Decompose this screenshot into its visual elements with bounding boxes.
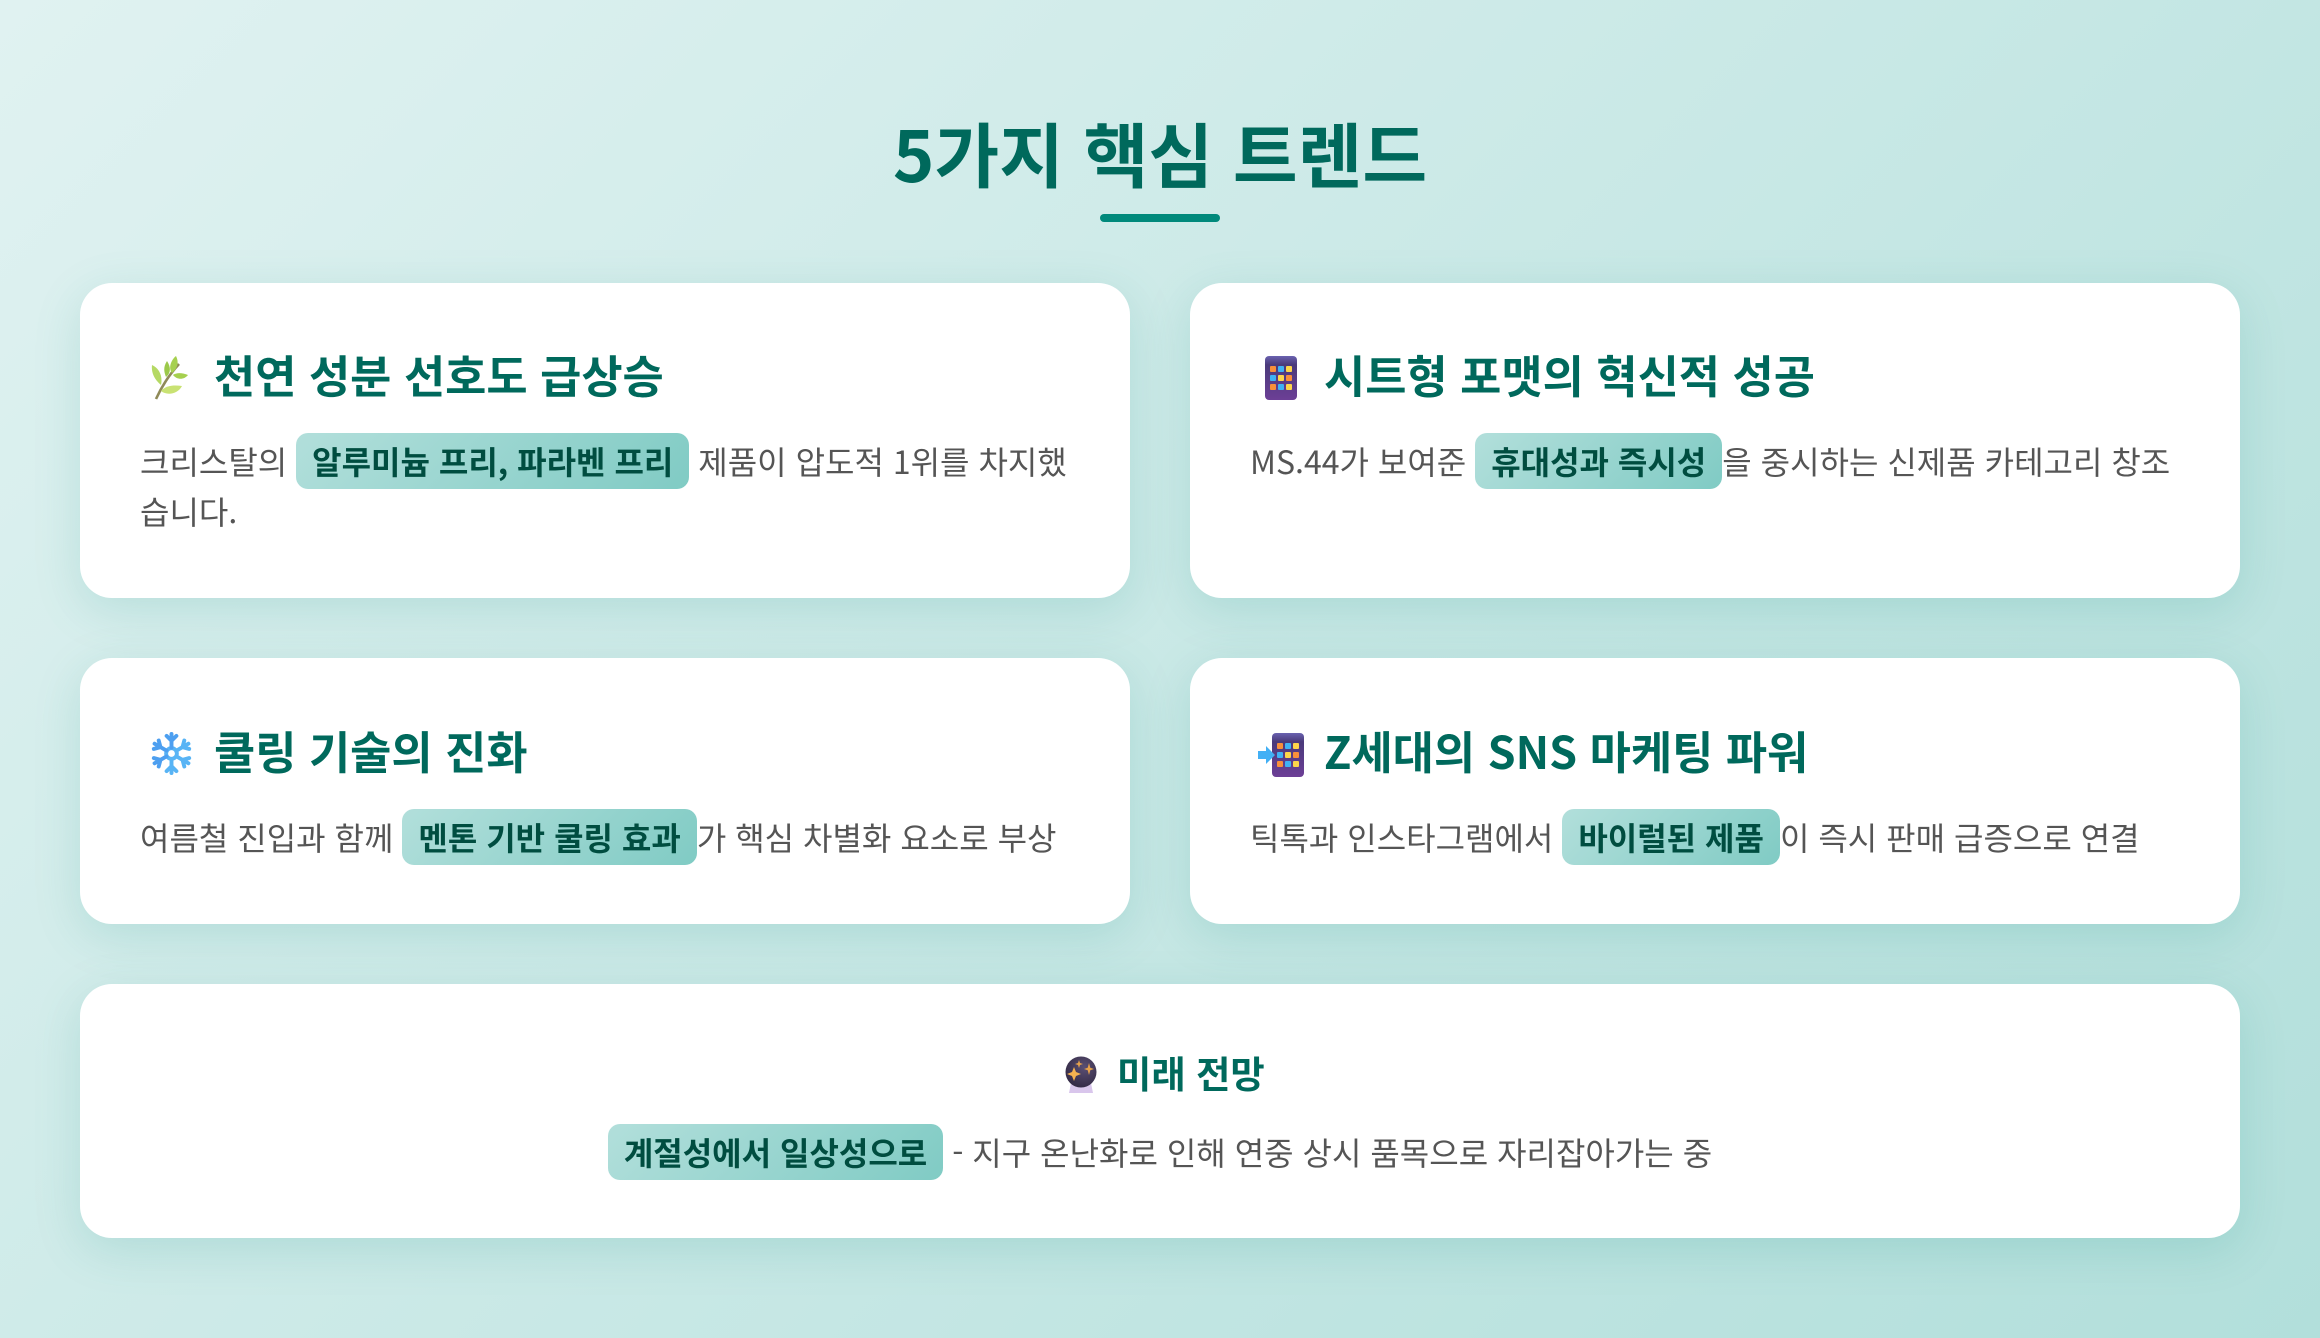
card body text: 습니다. (140, 488, 237, 534)
card body text: 여름철 진입과 함께 멘톤 기반 쿨링 효과 가 핵심 차별화 요소로 부상 (140, 814, 1056, 860)
panel: natural ingredients (80, 282, 1130, 598)
card heading: Z세대의 SNS 마케팅 파워 (1324, 717, 1808, 782)
card heading: 시트형 포맷의 혁신적 성공 (1324, 340, 1815, 406)
title: 5가지 핵심 트렌드 (893, 101, 1427, 203)
icon: herb (152, 356, 188, 400)
card body text: 계절성에서 일상성으로 - 지구 온난화로 인해 연중 상시 품목으로 자리잡아가는 중 (624, 1129, 1712, 1175)
card body text: MS.44가 보여준 휴대성과 즉시성 을 중시하는 신제품 카테고리 창조 (1250, 438, 2170, 484)
card heading: 미래 전망 (1117, 1045, 1265, 1099)
panel: cooling technology (80, 658, 1130, 924)
card body text: 크리스탈의 알루미늄 프리, 파라벤 프리 제품이 압도적 1위를 차지했 (140, 438, 1067, 484)
card heading: 쿨링 기술의 진화 (214, 717, 528, 782)
icon: snowflake (152, 732, 192, 775)
title underline (1100, 214, 1220, 222)
icon: tablet (1265, 356, 1297, 400)
card body text: 틱톡과 인스타그램에서 바이럴된 제품 이 즉시 판매 급증으로 연결 (1250, 814, 2140, 860)
panel: gen Z SNS marketing (1190, 658, 2240, 924)
panel: sheet format (1190, 282, 2240, 598)
card body text (140, 433, 1067, 534)
card heading: 천연 성분 선호도 급상승 (214, 340, 664, 406)
icon: crystal ball (1066, 1056, 1096, 1093)
panel: future outlook (80, 984, 2240, 1238)
icon: tablet with arrow (1258, 733, 1304, 777)
